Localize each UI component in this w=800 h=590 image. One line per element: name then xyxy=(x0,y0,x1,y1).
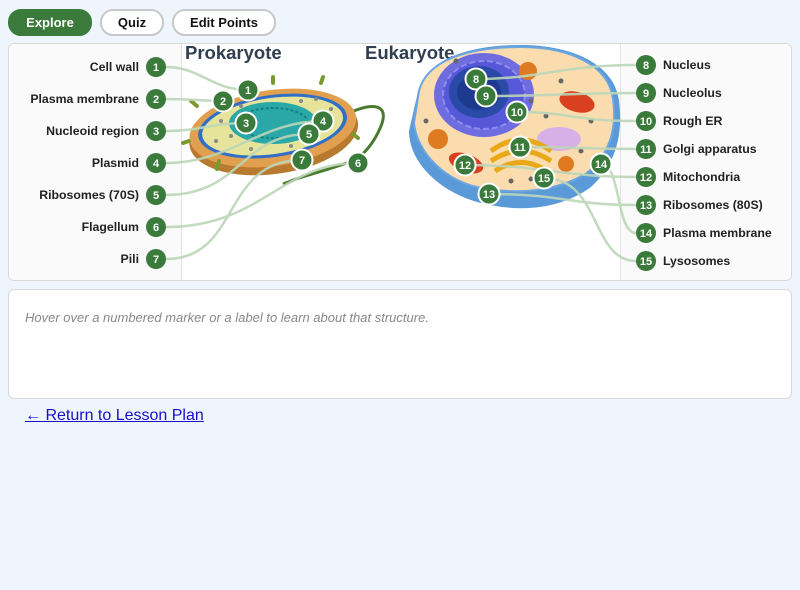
labels: eukaryote list xyxy=(663,58,772,268)
numbered markers: 7 xyxy=(299,155,305,167)
connector lines xyxy=(166,65,636,261)
labels: eukaryote list: Nucleus xyxy=(663,58,711,72)
numbered markers: 9 xyxy=(483,91,489,103)
numbered markers: 5 xyxy=(306,129,312,141)
info text: Hover over a numbered marker or a label to learn about that structure. xyxy=(25,310,429,325)
labels: prokaryote list: Plasma membrane xyxy=(30,92,139,106)
numbered markers: 5 xyxy=(153,190,159,202)
numbered markers: 2 xyxy=(220,96,226,108)
numbered markers: 8 xyxy=(473,74,479,86)
button: Edit Points: Edit Points xyxy=(190,15,258,30)
labels: eukaryote list: Nucleolus xyxy=(663,86,722,100)
numbered markers: 12 xyxy=(459,160,471,172)
illustration: eukaryote cell xyxy=(409,45,620,208)
labels: prokaryote list: Cell wall xyxy=(90,60,139,74)
labels: eukaryote list: Golgi apparatus xyxy=(663,142,757,156)
numbered markers: 14 xyxy=(595,159,608,171)
numbered markers: 10 xyxy=(511,107,523,119)
numbered markers: 12 xyxy=(640,172,652,184)
labels: prokaryote list: Flagellum xyxy=(82,220,139,234)
numbered markers: 4 xyxy=(320,116,327,128)
link: return: ← Return to Lesson Plan xyxy=(25,407,204,424)
button: Edit Points xyxy=(172,9,276,36)
numbered markers: 13 xyxy=(483,189,495,201)
numbered markers xyxy=(146,55,656,271)
labels: prokaryote list: Plasmid xyxy=(92,156,139,170)
numbered markers: 1 xyxy=(153,62,159,74)
numbered markers: 11 xyxy=(514,142,526,154)
button: Explore: Explore xyxy=(26,15,74,30)
numbered markers: 4 xyxy=(153,158,160,170)
numbered markers: 13 xyxy=(640,200,652,212)
button: Quiz: Quiz xyxy=(118,15,146,30)
labels: prokaryote list: Ribosomes (70S) xyxy=(39,188,139,202)
numbered markers: 9 xyxy=(643,88,649,100)
numbered markers: 14 xyxy=(640,228,653,240)
labels: eukaryote list: Ribosomes (80S) xyxy=(663,198,763,212)
labels: prokaryote list xyxy=(30,60,139,266)
panel: diagram xyxy=(8,43,792,281)
numbered markers: 2 xyxy=(153,94,159,106)
labels: eukaryote list: Rough ER xyxy=(663,114,723,128)
numbered markers: 7 xyxy=(153,254,159,266)
numbered markers: 15 xyxy=(538,173,550,185)
info box xyxy=(8,289,792,399)
numbered markers: 11 xyxy=(640,144,652,156)
numbered markers: 15 xyxy=(640,256,652,268)
numbered markers: 6 xyxy=(355,158,361,170)
numbered markers: 3 xyxy=(243,118,249,130)
numbered markers: 6 xyxy=(153,222,159,234)
labels: eukaryote list: Mitochondria xyxy=(663,170,740,184)
labels: prokaryote list: Pili xyxy=(121,252,139,266)
labels: eukaryote list: Lysosomes xyxy=(663,254,730,268)
numbered markers: 3 xyxy=(153,126,159,138)
numbered markers: 1 xyxy=(245,85,251,97)
button: Quiz xyxy=(100,9,164,36)
labels: prokaryote list: Nucleoid region xyxy=(46,124,139,138)
illustration: prokaryote cell xyxy=(183,77,383,185)
button: Explore xyxy=(8,9,92,36)
labels: eukaryote list: Plasma membrane xyxy=(663,226,772,240)
numbered markers: 10 xyxy=(640,116,652,128)
numbered markers: 8 xyxy=(643,60,649,72)
